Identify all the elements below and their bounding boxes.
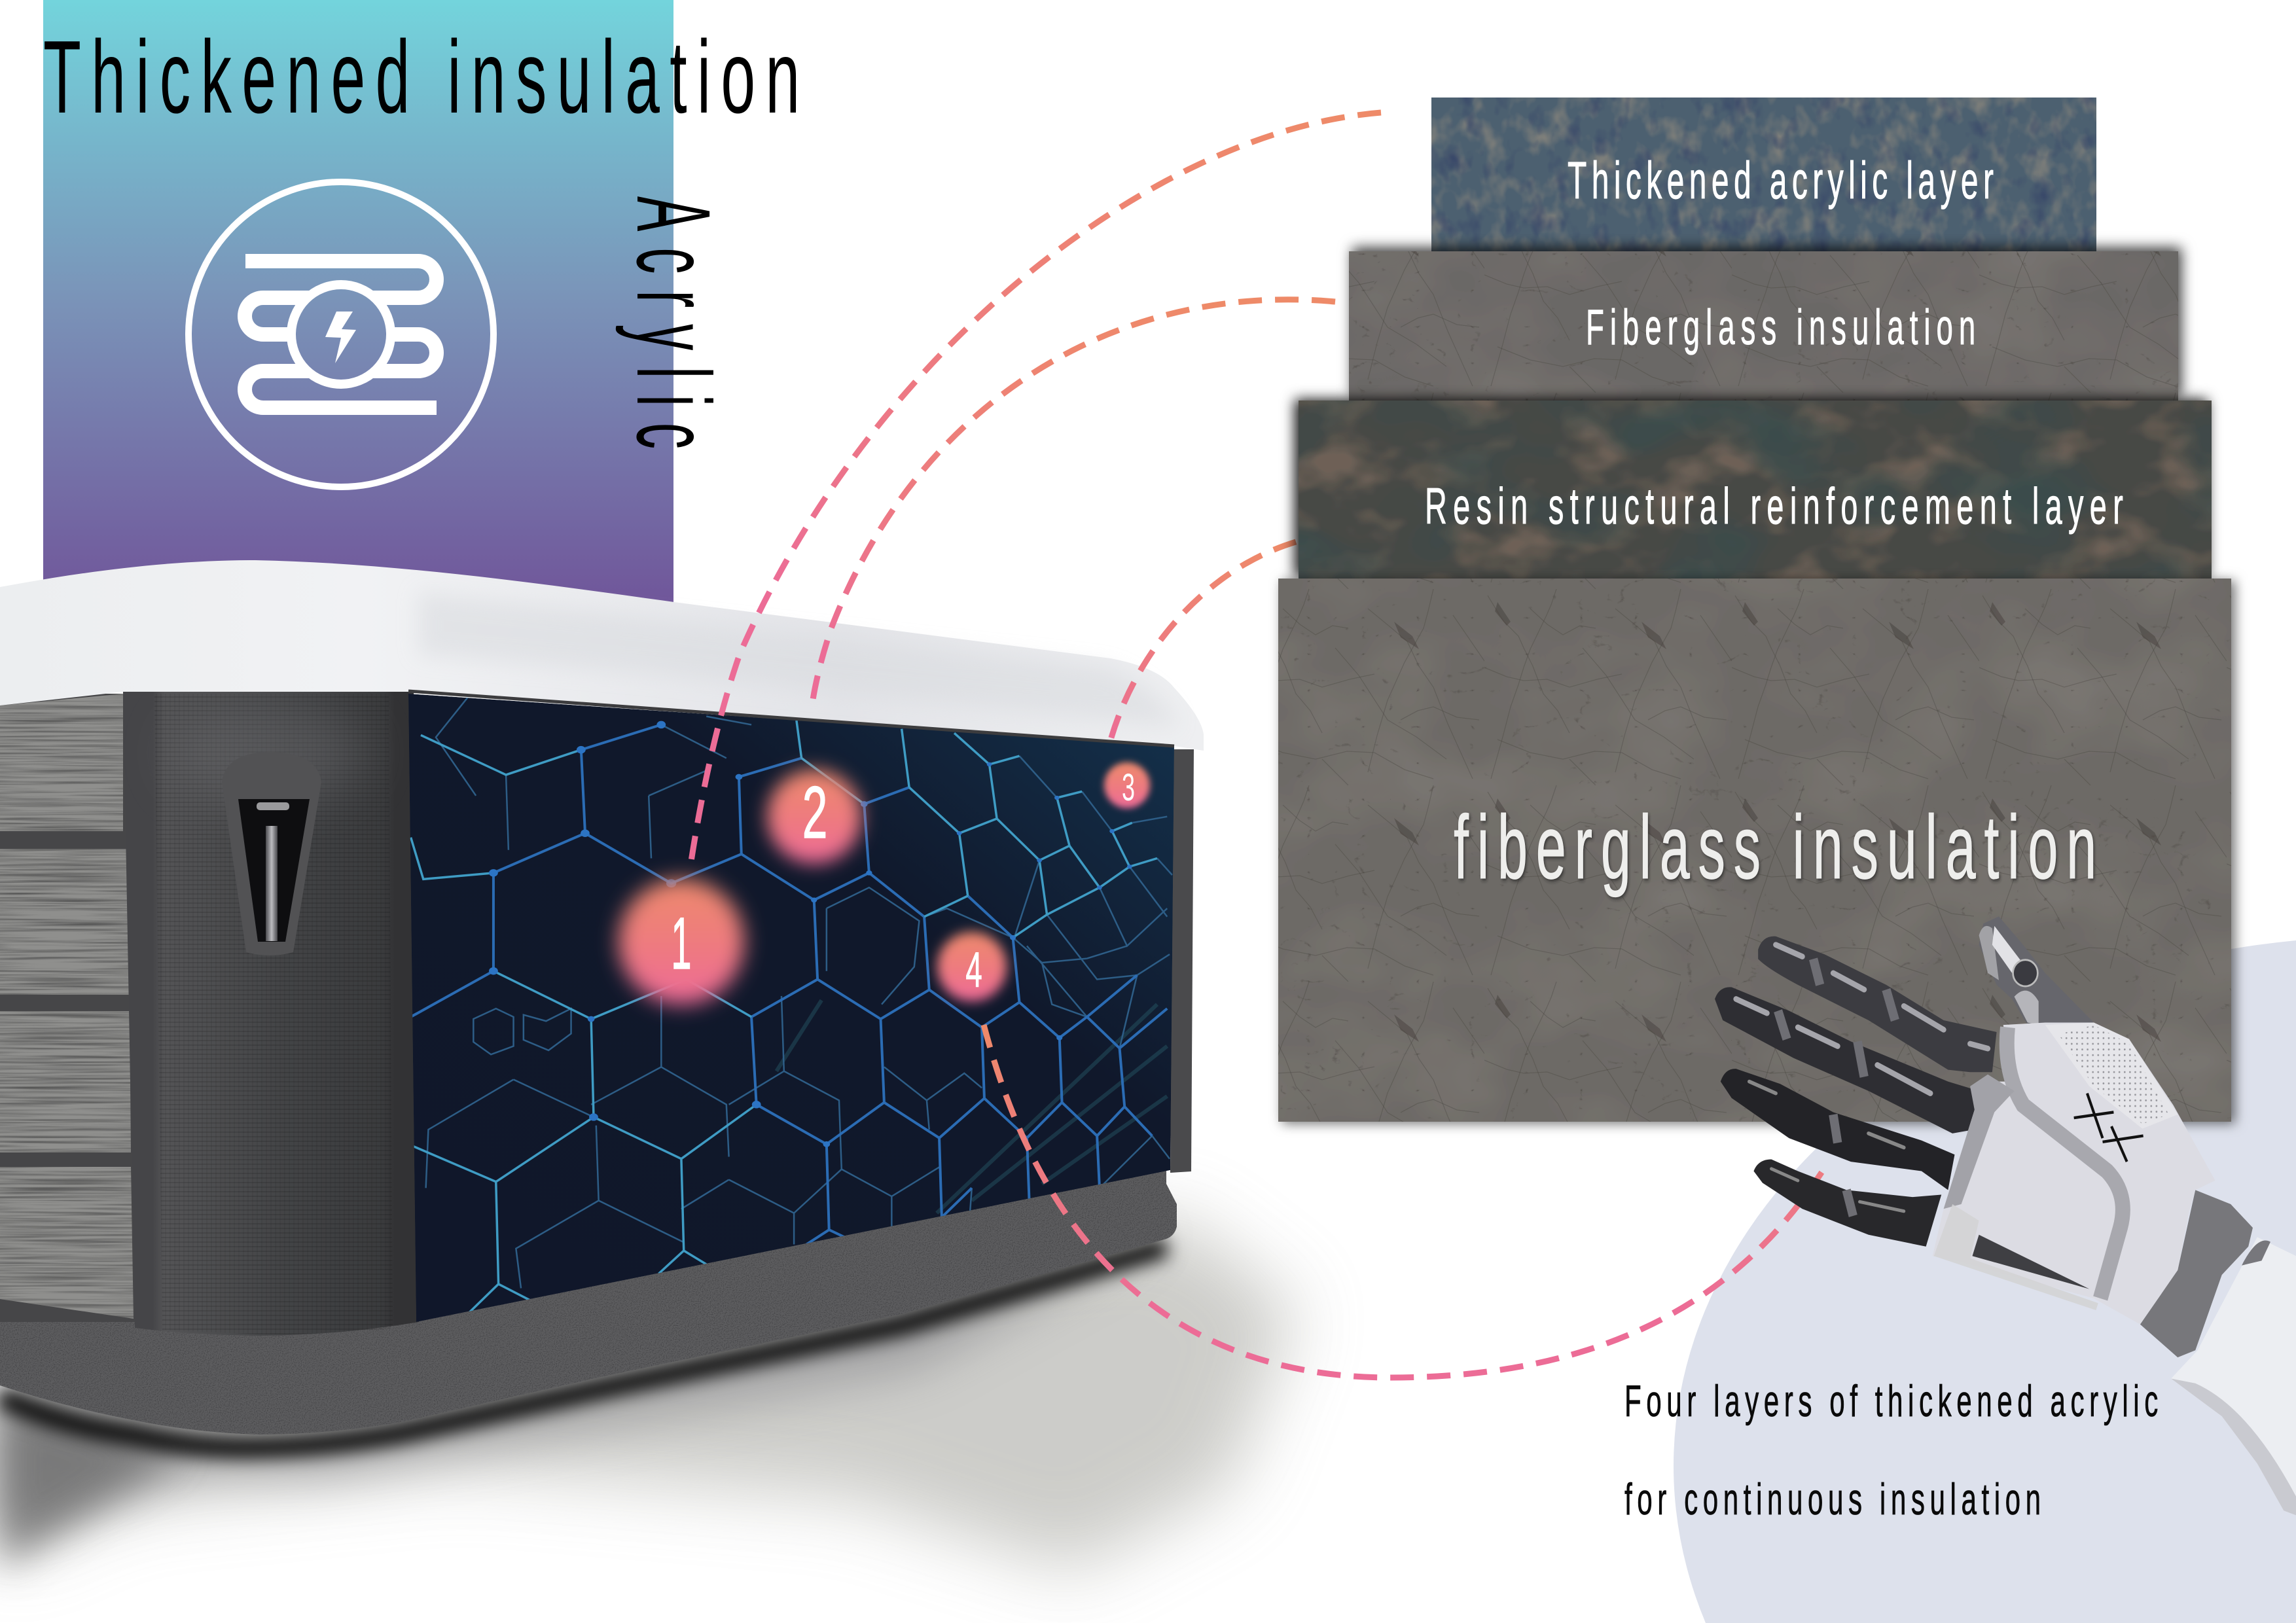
- wood side panels: [0, 694, 141, 1322]
- floor shadow under hot tub: [0, 1217, 1296, 1571]
- layer 1: thickened acrylic: [1431, 98, 2096, 251]
- caption line 1: Four layers of thickened acrylic: [1624, 1376, 2158, 1425]
- glowing marker 4 with number: [937, 932, 1007, 1001]
- lid surface shading: [419, 592, 1178, 726]
- back of hand: [1933, 1023, 2215, 1325]
- dashed connector 3: [1108, 542, 1296, 749]
- finger knuckle guard: [1944, 1075, 2015, 1209]
- finger highlights and joints: [1736, 945, 1988, 1216]
- cyan hex lines: [411, 721, 1157, 1313]
- tub base: [0, 1158, 1177, 1435]
- thin background hex lines: [426, 687, 1172, 1288]
- glowing marker 2 with number: 2: [802, 772, 827, 853]
- glowing marker 3 with number: [1104, 762, 1150, 809]
- grey hand band: [2007, 1027, 2123, 1298]
- network nodes: [489, 721, 1132, 1147]
- hexagon network panel: [408, 687, 1174, 1322]
- hot tub illustration: [0, 560, 1204, 1435]
- perforated panel: [2045, 1023, 2178, 1129]
- glowing marker 4 with number: 4: [965, 942, 982, 998]
- glowing marker 1 with number: 1: [671, 902, 692, 984]
- dashed connector 1: [691, 113, 1381, 861]
- glowing marker 1 with number: [619, 879, 744, 1005]
- glowing marker 3 with number: 3: [1122, 766, 1135, 809]
- tub lid: [0, 560, 1204, 751]
- corner post: [123, 692, 419, 1336]
- title: Thickened insulation: [43, 19, 800, 135]
- thumb: [1979, 916, 2094, 1025]
- fingers: [1715, 936, 1997, 1247]
- layer 4 label: fiberglass insulation: [1454, 797, 2096, 898]
- layer 2: fiberglass: [1349, 251, 2178, 401]
- wrist band: [2140, 1190, 2253, 1357]
- layer 4: fiberglass: [1278, 579, 2231, 1122]
- vertical label: Acrylic: Acrylic: [615, 196, 732, 449]
- dashed connector 2: [813, 300, 1335, 700]
- caption: [1624, 1376, 2158, 1524]
- forearm: [2171, 1237, 2296, 1515]
- layer 3 label: Resin structural reinforcement layer: [1425, 478, 2123, 535]
- dashed connector 4: [984, 1025, 1829, 1378]
- icon: heating coil in circle: [188, 182, 493, 487]
- main blue hex lines: [411, 724, 1167, 1244]
- right edge post: [1170, 749, 1194, 1173]
- robotic hand: [1715, 916, 2296, 1515]
- caption line 2: for continuous insulation: [1624, 1474, 2041, 1524]
- layer 1 label: Thickened acrylic layer: [1568, 151, 1994, 209]
- palm frame: [1934, 1204, 2098, 1310]
- lavender background circle: [1674, 940, 2296, 1623]
- layer 3: resin reinforcement: [1299, 401, 2212, 579]
- palm cutout: [1972, 1235, 2089, 1289]
- lid lower seam: [408, 691, 1174, 746]
- light streaks: [776, 1000, 1167, 1213]
- icon: side handle: [222, 752, 321, 955]
- cross marks: [2074, 1094, 2144, 1162]
- layer 2 label: Fiberglass insulation: [1586, 300, 1975, 355]
- gradient header panel: [43, 0, 673, 605]
- glowing marker 2 with number: [767, 770, 861, 864]
